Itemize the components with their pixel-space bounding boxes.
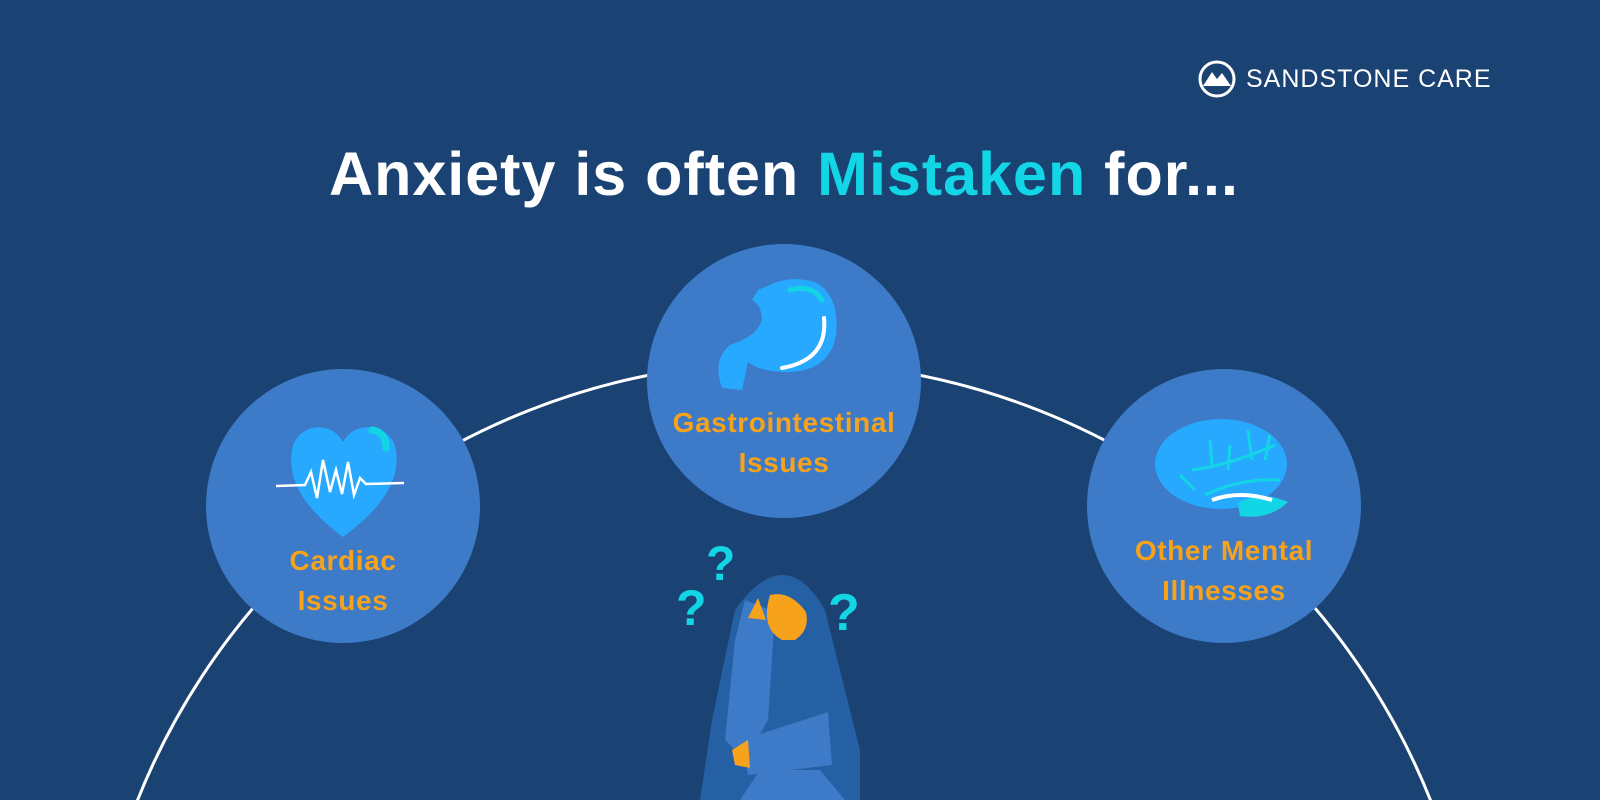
label: gastro: Issues [739,447,829,478]
question marks: ? [828,584,860,642]
panel: gastro circle [647,244,921,518]
question marks: ? [706,538,735,591]
logo text: SANDSTONE CARE [1246,65,1492,93]
label: cardiac [290,545,396,616]
label: gastro [673,407,895,478]
label: mental: Illnesses [1162,575,1286,606]
question marks [676,538,860,642]
label: mental [1135,535,1313,606]
icon: brain [1155,419,1288,517]
icon: heart [276,427,404,537]
panel: cardiac circle [206,369,480,643]
title: Anxiety is often Mistaken for... [329,140,1239,208]
logo [1200,62,1234,96]
panel: mental circle [1087,369,1361,643]
label: gastro: Gastrointestinal [673,407,895,438]
icon: stomach [718,279,837,390]
label: mental: Other Mental [1135,535,1313,566]
question marks: ? [676,580,707,636]
person [700,575,860,800]
label: cardiac: Issues [298,585,388,616]
label: cardiac: Cardiac [290,545,396,576]
